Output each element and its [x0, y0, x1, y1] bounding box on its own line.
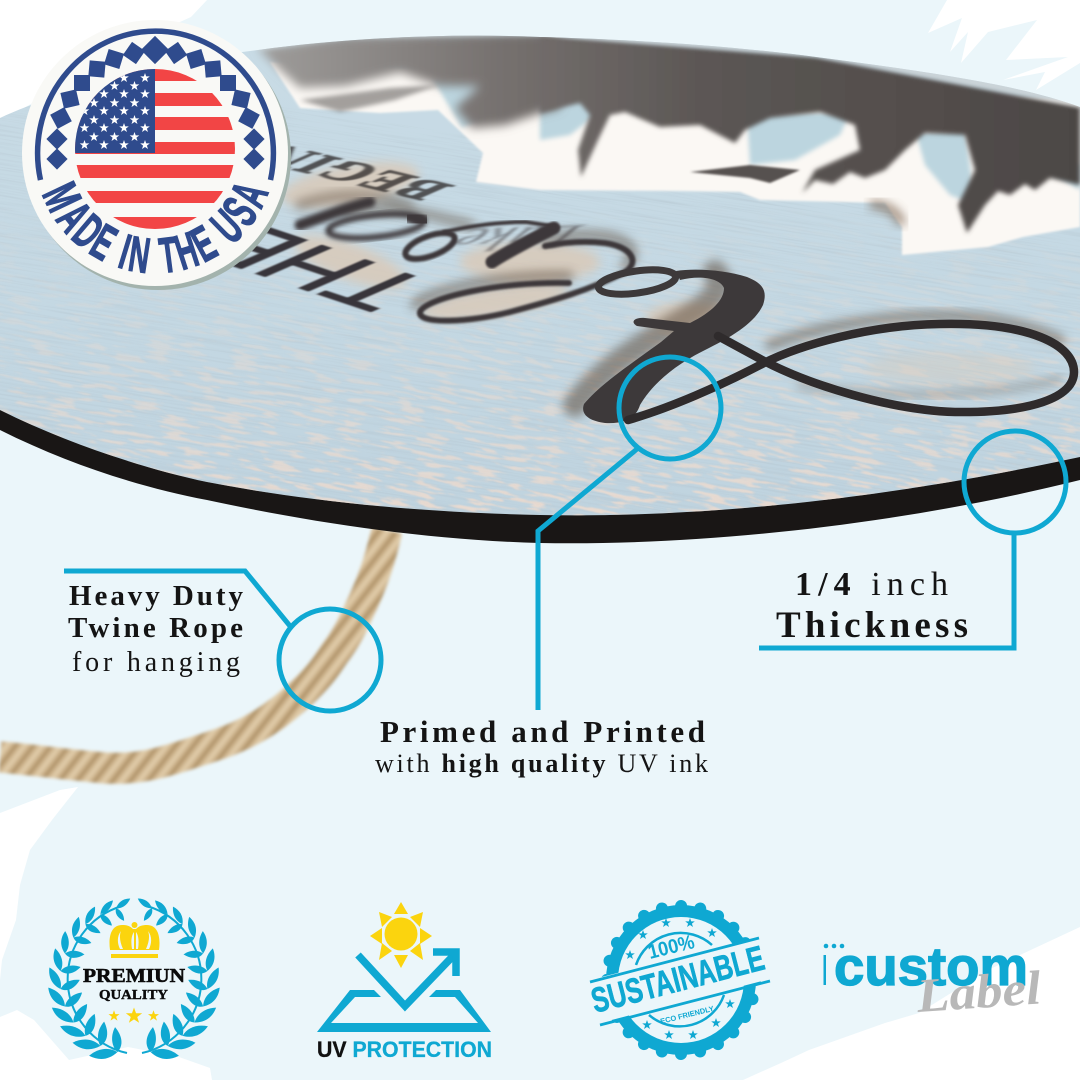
badge: UV protection	[317, 902, 492, 1062]
text: made in the USA: T	[156, 226, 181, 284]
text: 100%: 100%	[646, 931, 697, 964]
text: made in the USA: S	[211, 188, 268, 235]
text: made in the USA: E	[82, 213, 126, 271]
sun	[370, 902, 432, 968]
round wooden sign	[0, 36, 1080, 544]
callout: rope	[64, 571, 381, 711]
forest cut-out	[258, 31, 1080, 255]
stars	[625, 918, 735, 1039]
callout: print quality	[538, 357, 721, 710]
sign surface	[0, 36, 1080, 516]
text: label: Label	[914, 961, 1043, 1023]
text: sustainable: SUSTAINABLE	[587, 939, 768, 1021]
text: eco friendly: ECO FRIENDLY	[659, 1004, 715, 1026]
banner	[590, 937, 770, 1023]
inner arcs	[636, 933, 724, 1026]
text: heavy duty twine rope: for hanging	[72, 647, 240, 678]
text: thickness: 1/4 inch	[795, 566, 948, 603]
laurel wreath	[44, 895, 224, 1064]
outer arc	[38, 31, 273, 180]
wood grain	[8, 136, 1080, 510]
text: THE: THE	[168, 213, 459, 321]
crown	[110, 922, 160, 958]
text: made in the USA: E	[182, 214, 225, 273]
logo: custom label	[824, 937, 1043, 1023]
text: made in the USA: H	[168, 221, 205, 281]
text: BEGINS: BEGINS	[211, 133, 466, 205]
text: made in the USA: D	[62, 203, 115, 259]
text: made in the USA: A	[219, 173, 279, 215]
text: made in the USA: M	[31, 174, 93, 220]
big L flourish	[583, 270, 1074, 423]
text: made in the USA: A	[46, 191, 103, 242]
badge: sustainable	[587, 905, 770, 1055]
logo dots	[824, 944, 844, 948]
callout: thickness	[759, 431, 1066, 648]
text: primed and printed	[375, 714, 708, 778]
script flourishes	[300, 202, 677, 321]
text: made in the USA: I	[113, 223, 137, 280]
stars	[108, 1008, 159, 1023]
beige inner shading	[278, 153, 735, 334]
flag	[75, 69, 236, 230]
text: thickness	[776, 566, 968, 646]
text: UV protection: UV PROTECTION	[317, 1037, 492, 1062]
seal	[606, 905, 756, 1055]
text: Lake script: Lake	[439, 217, 593, 259]
text: thickness: Thickness	[776, 605, 968, 646]
text: made in the USA	[31, 173, 279, 284]
arrow	[358, 952, 456, 1006]
text: heavy duty twine rope: Twine Rope	[68, 612, 243, 644]
text: custom: custom	[834, 937, 1028, 997]
base	[317, 990, 491, 1032]
badge: premium quality	[44, 895, 224, 1064]
text: premium: PREMIUN	[83, 965, 186, 987]
tree line, near	[540, 35, 1080, 233]
badge: made in the USA	[22, 20, 291, 290]
diamond ring	[46, 36, 265, 170]
sign edge	[0, 405, 1080, 543]
text: primed and printed: Primed and Printed	[380, 714, 705, 749]
tree line, far left	[258, 32, 560, 128]
paint flecks	[0, 286, 1080, 516]
lettering glow	[300, 196, 1060, 405]
text: quality: QUALITY	[99, 988, 168, 1003]
text: heavy duty twine rope	[68, 580, 244, 678]
text: primed and printed: with high quality UV ink	[375, 749, 708, 778]
text: heavy duty twine rope: Heavy Duty	[69, 580, 244, 612]
text: made in the USA: U	[200, 199, 254, 254]
twine rope	[0, 530, 387, 768]
text: made in the USA: N	[125, 225, 154, 284]
